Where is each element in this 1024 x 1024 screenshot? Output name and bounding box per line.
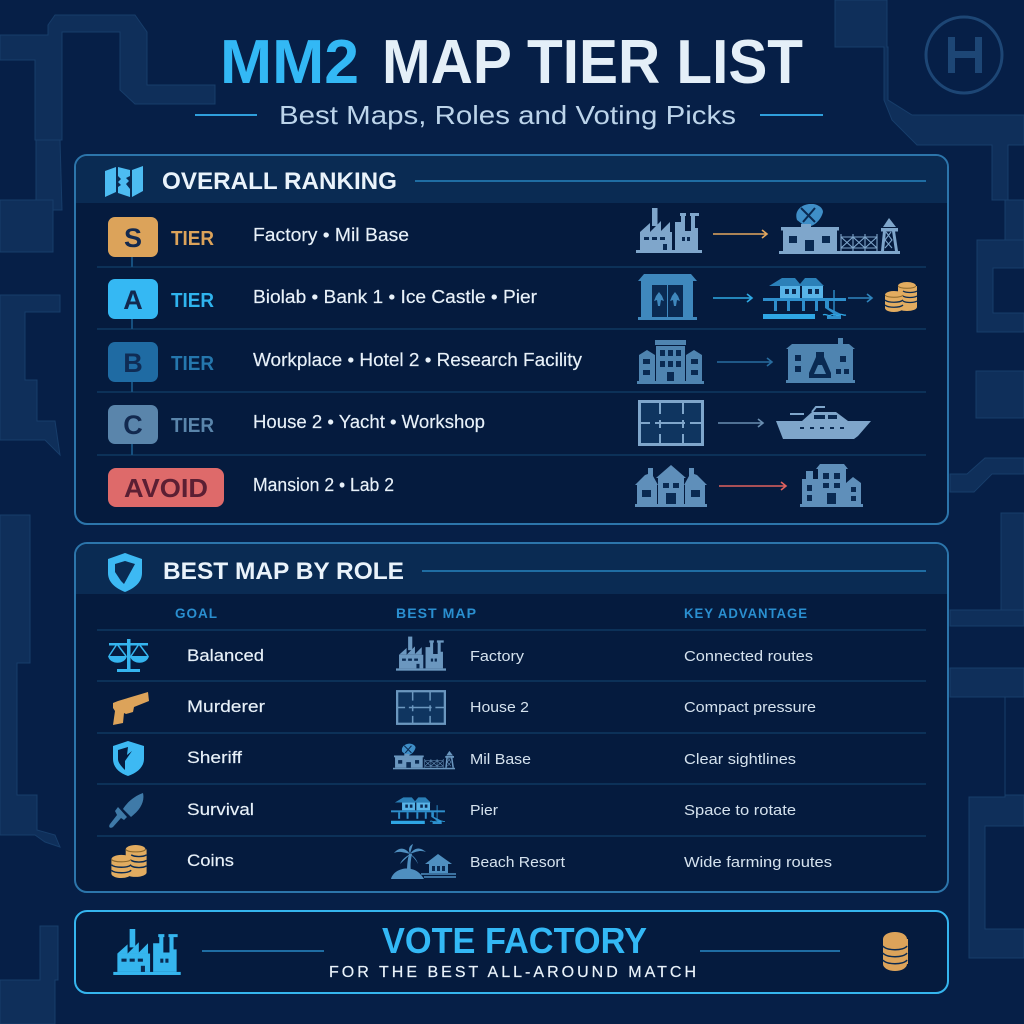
panel: best map by role <box>75 543 948 892</box>
tier row: S: Factory • Mil Base <box>253 225 409 245</box>
role row: coins: Coins <box>187 851 234 870</box>
panel: call to action <box>75 911 948 993</box>
tier row: B: B <box>123 348 143 378</box>
tier row: A: TIER <box>171 290 215 312</box>
tier row: avoid: Mansion 2 • Lab 2 <box>253 475 394 495</box>
title: MM2: MM2 <box>220 28 359 97</box>
column headers: KEY ADVANTAGE <box>684 605 808 621</box>
tier row: C: C <box>123 410 143 440</box>
role row: balanced <box>108 637 813 672</box>
role row: murderer: Compact pressure <box>684 699 816 716</box>
tier row: B <box>108 338 855 384</box>
panel: overall ranking <box>75 155 948 524</box>
role row: coins <box>111 844 832 879</box>
role row: murderer: House 2 <box>470 699 529 716</box>
tier row: C <box>108 402 871 444</box>
subtitle: Best Maps, Roles and Voting Picks <box>279 100 736 130</box>
role row: survival <box>109 793 796 828</box>
column headers: BEST MAP <box>396 605 477 621</box>
tier row: A: A <box>123 285 143 315</box>
tier row: avoid <box>108 464 863 507</box>
role row: coins: Wide farming routes <box>684 854 832 871</box>
headline: VOTE FACTORY <box>382 920 647 961</box>
tier row: C: House 2 • Yacht • Workshop <box>253 412 485 432</box>
tier row: S: S <box>124 223 142 253</box>
heading: overall ranking: OVERALL RANKING <box>162 168 397 195</box>
tier row: B: TIER <box>171 353 215 375</box>
role row: survival: Pier <box>470 802 498 819</box>
column headers <box>175 605 808 621</box>
icon: shield heading <box>108 553 142 592</box>
tier row: S <box>108 204 900 257</box>
role row: sheriff: Sheriff <box>187 748 242 767</box>
tier row: C: TIER <box>171 415 215 437</box>
tier row: A <box>108 274 917 320</box>
heading: best map by role: BEST MAP BY ROLE <box>163 558 404 585</box>
role row: balanced: Balanced <box>187 646 264 665</box>
icon: map <box>105 166 143 197</box>
role row: survival: Space to rotate <box>684 802 796 819</box>
tier row: B: Workplace • Hotel 2 • Research Facility <box>253 350 582 370</box>
role row: survival: Survival <box>187 800 254 819</box>
role row: sheriff <box>113 741 796 776</box>
role row: coins: Beach Resort <box>470 854 566 871</box>
tier row: S: TIER <box>171 228 215 250</box>
role row: sheriff: Clear sightlines <box>684 751 796 768</box>
icon: factory <box>113 929 181 975</box>
role row: sheriff: Mil Base <box>470 751 531 768</box>
role row: murderer <box>113 691 816 725</box>
tier row: avoid: AVOID <box>124 473 208 503</box>
subline: FOR THE BEST ALL-AROUND MATCH <box>329 964 696 981</box>
title: map tier list: MAP TIER LIST <box>382 28 803 97</box>
role row: balanced: Connected routes <box>684 648 813 665</box>
role row: murderer: Murderer <box>187 697 265 716</box>
column headers: GOAL <box>175 605 218 621</box>
icon: coins <box>883 932 908 971</box>
tier row: A: Biolab • Bank 1 • Ice Castle • Pier <box>253 287 537 307</box>
role row: balanced: Factory <box>470 648 525 665</box>
